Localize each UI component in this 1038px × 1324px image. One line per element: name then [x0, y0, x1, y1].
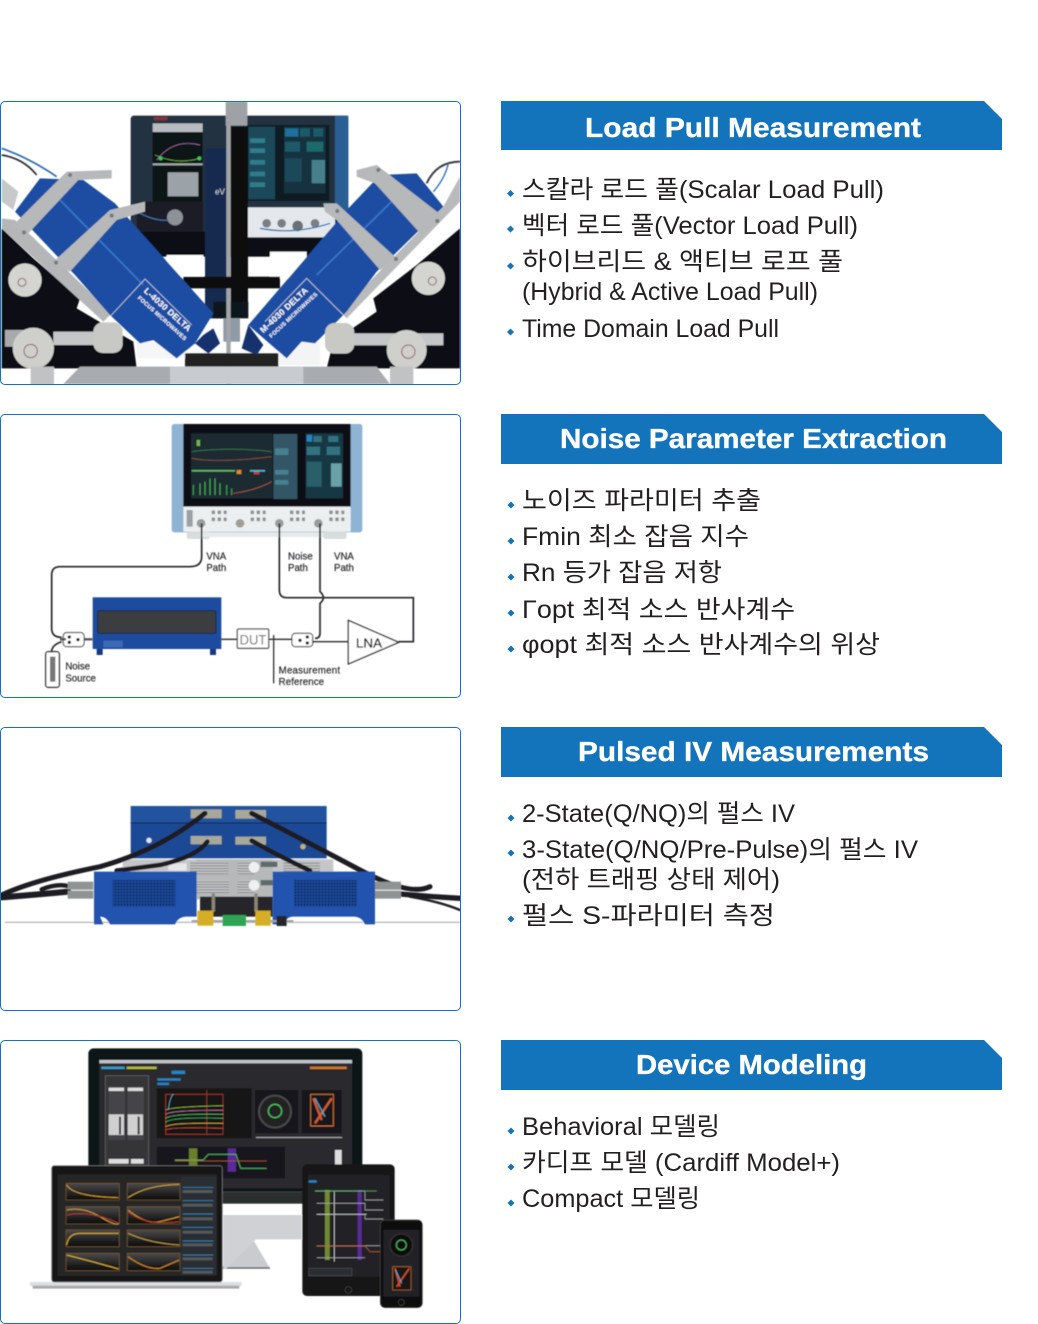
list: noise parameter items: 노이즈 파라미터 추출 — [522, 487, 761, 515]
list: load pull items: (Hybrid & Active Load Pull) — [522, 278, 818, 306]
cables — [2, 813, 460, 910]
DUT fixtures — [192, 920, 293, 922]
output coupler — [292, 633, 313, 647]
IV chart — [157, 1088, 252, 1138]
tablet — [302, 1164, 395, 1296]
laptop — [30, 1166, 242, 1289]
right tuner label: FOCUS MICROWAVES — [269, 292, 319, 340]
illustration: modeling software on devices — [30, 1048, 424, 1309]
labels — [65, 551, 354, 688]
list: load pull items — [507, 176, 884, 343]
labels: VNA — [206, 551, 227, 562]
illustration: pulsed IV system — [1, 805, 460, 927]
list: noise parameter items: φopt 최적 소스 반사계수의 위상 — [522, 631, 880, 659]
ground line — [5, 922, 460, 923]
labels: Source — [65, 673, 96, 684]
right rail — [340, 177, 460, 318]
list: device modeling items: Behavioral 모델링 — [522, 1113, 720, 1141]
analyzer body — [131, 116, 348, 234]
list: load pull items: Time Domain Load Pull — [522, 315, 779, 343]
black support blocks — [2, 228, 137, 368]
labels: Path — [334, 563, 354, 574]
list: pulsed IV items: (전하 트래핑 상태 제어) — [522, 866, 780, 894]
list: load pull items: 스칼라 로드 풀(Scalar Load Pull) — [522, 176, 884, 204]
labels: Noise — [65, 662, 90, 673]
heading: noise parameter extraction: Noise Parameter Extraction — [560, 423, 947, 454]
coupler and noise source — [63, 633, 84, 647]
list: device modeling items: Compact 모델링 — [522, 1185, 700, 1213]
heading: pulsed IV measurements — [501, 727, 1002, 777]
panel: load pull photo — [0, 101, 461, 385]
panel: noise parameter diagram — [0, 414, 461, 698]
right tuner — [248, 173, 443, 358]
list: pulsed IV items: 2-State(Q/NQ)의 펄스 IV — [522, 800, 795, 828]
list: load pull items: 하이브리드 & 액티브 로프 풀 — [522, 248, 843, 276]
vector network analyzer — [172, 424, 362, 539]
tuner box — [93, 597, 221, 649]
list: noise parameter items: Γopt 최적 소스 반사계수 — [522, 596, 795, 624]
labels: Reference — [279, 677, 324, 688]
labels: Noise — [288, 551, 313, 562]
heading: device modeling: Device Modeling — [636, 1049, 867, 1080]
diagram: noise measurement setup: LNA — [356, 635, 382, 650]
diagram: noise measurement setup — [44, 423, 415, 689]
cables — [2, 148, 57, 177]
silver arms — [12, 170, 112, 233]
cables — [52, 523, 202, 637]
LNA — [348, 620, 399, 664]
list: noise parameter items: Rn 등가 잡음 저항 — [522, 559, 722, 587]
labels: Path — [288, 563, 308, 574]
pulser racks — [131, 806, 327, 823]
rollers — [8, 263, 42, 297]
heading: pulsed IV measurements: Pulsed IV Measurements — [578, 736, 929, 767]
left tuner — [15, 178, 213, 358]
list: noise parameter items — [508, 487, 880, 659]
desktop monitor — [88, 1048, 362, 1269]
floor plate — [63, 367, 390, 384]
list: load pull items: 벡터 로드 풀(Vector Load Pull) — [522, 212, 858, 240]
right blue tuner — [273, 872, 375, 924]
heading: load pull measurement: Load Pull Measurement — [585, 112, 921, 143]
diagram: noise measurement setup: DUT — [240, 631, 267, 647]
probe station — [205, 148, 229, 318]
left tuner label: L-4030 DELTA — [142, 286, 194, 334]
power supply — [123, 859, 333, 873]
list: device modeling items: 카디프 모델 (Cardiff Model+) — [522, 1149, 840, 1177]
heading: noise parameter extraction — [501, 414, 1002, 464]
phone — [380, 1220, 422, 1308]
heading: load pull measurement — [501, 101, 1002, 150]
labels: VNA — [334, 551, 354, 562]
right tuner label: M-4030 DELTA — [258, 285, 310, 335]
left blue tuner — [94, 872, 197, 924]
labels: Measurement — [279, 665, 340, 676]
illustration: load pull tuners and analyzer — [1, 102, 460, 384]
panel: device modeling screens — [0, 1040, 461, 1324]
polar plot — [302, 1090, 342, 1133]
smith chart — [255, 1090, 298, 1133]
DUT — [221, 637, 292, 641]
heading: device modeling — [501, 1040, 1002, 1090]
left rail — [2, 218, 112, 322]
panel: pulsed IV photo — [0, 727, 461, 1011]
tube connectors — [68, 882, 93, 890]
labels: Path — [206, 563, 226, 574]
list: noise parameter items: Fmin 최소 잡음 지수 — [522, 523, 749, 551]
illustration: load pull tuners and analyzer: eV — [215, 187, 225, 196]
list: pulsed IV items: 3-State(Q/NQ/Pre-Pulse)의 펄스 IV — [522, 836, 918, 864]
knobs — [5, 330, 38, 347]
list: pulsed IV items: 펄스 S-파라미터 측정 — [522, 902, 775, 930]
list: pulsed IV items — [508, 800, 918, 930]
left tuner label: FOCUS MICROWAVES — [136, 295, 187, 342]
analyzer ports — [243, 207, 335, 237]
pulse chart — [157, 1147, 285, 1178]
list: device modeling items — [508, 1113, 840, 1213]
